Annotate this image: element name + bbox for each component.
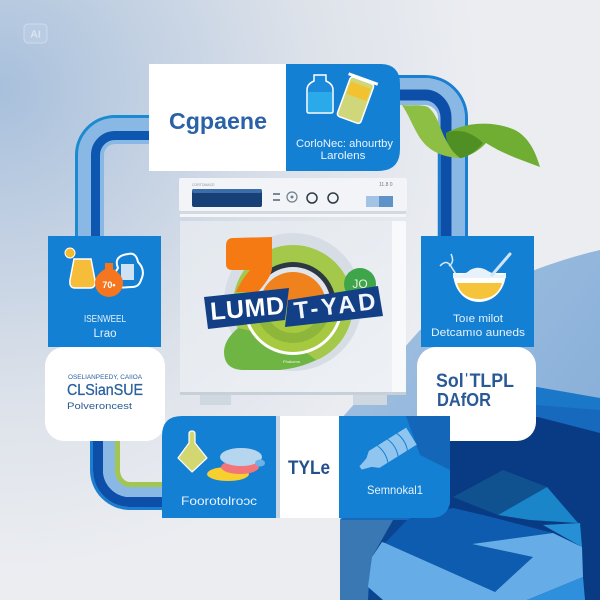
centre label: TYLe [288,458,330,479]
caption: Larolens [320,150,366,162]
heading panel [149,64,287,171]
white panel centre [276,416,340,518]
caption: ISENWEEL [84,313,126,325]
caption [84,313,126,340]
icon: mixing bowl [440,254,510,302]
white panel text: CLSianSUE [67,382,143,399]
caption: Lrao [93,328,117,340]
white panel [45,347,165,441]
panel: bottom card [162,416,450,518]
control panel: 11.8 0 [379,182,393,188]
icon: green leaf [402,105,540,167]
washing machine [179,178,407,405]
panel: top card [149,64,400,171]
blue panel right [339,416,450,518]
pipe: bottom left loop [92,438,170,508]
fine print: Phakoma [283,359,301,364]
machine body [180,221,406,395]
blue panel [48,236,161,347]
caption: CorloNec: ahourtby [296,138,393,150]
background: faceted blue hill [340,250,600,600]
white panel text: Polveroncest [67,401,132,412]
blue panel left [162,416,277,518]
heading panel: Cgpaene [169,108,267,134]
icon: blue bottle [307,75,333,113]
white panel text [67,374,143,412]
white panel text: SolˈTLPL [436,371,514,392]
caption [431,313,526,339]
blue panel [421,236,534,347]
caption [296,138,393,162]
blue panel [286,64,400,171]
orange swoosh [226,237,272,292]
panel: right card [417,236,536,441]
machine feet [200,394,387,405]
banner [204,286,383,329]
icon: stacked clothes [207,448,265,481]
caption: Detcamıo auneds [431,327,526,339]
icon: flask, tag and cloud: 70• [102,280,116,290]
pipe: top right loop [395,76,466,240]
drum rings [224,233,362,371]
caption: Semnokal1 [367,483,423,497]
icon: perfume bottle [178,431,207,472]
icon: flask, tag and cloud [65,248,143,297]
badge: AI mark: AI [30,28,41,40]
badge [344,268,376,300]
control panel: CORTOMACE [192,183,215,187]
badge: JO [352,277,368,291]
badge: AI mark [24,24,47,43]
pipe: left loop [76,116,152,240]
white panel [417,347,536,441]
banner: T-YAD [292,288,377,325]
caption: Toıe milot [453,313,503,325]
white panel text: DAfOR [437,390,491,410]
icon: tube [355,428,417,476]
white panel text: OSELIANPEEDY, CAIIOA [68,374,143,381]
white panel text [436,371,514,410]
icon: yellow jar [334,72,378,125]
control panel [179,178,407,217]
panel: left card [45,236,165,441]
banner: LUMD [209,292,285,326]
caption: Foorotolroɔc [181,494,257,508]
